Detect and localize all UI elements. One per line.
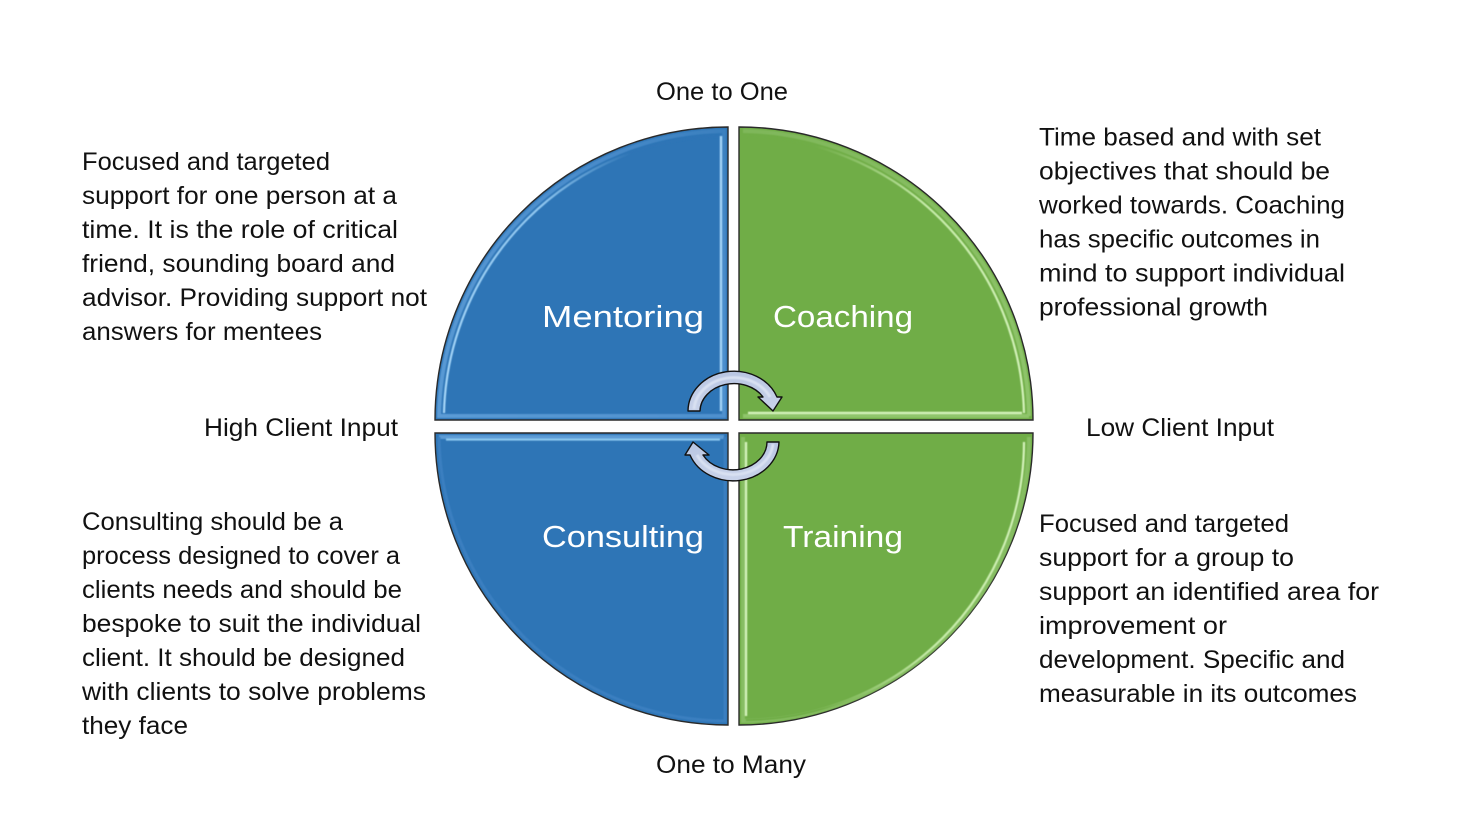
text block: Consulting description: Consulting should be a: [82, 508, 343, 536]
text block: Coaching description: objectives that should be: [1039, 158, 1330, 186]
text block: Training description: support an identified area for: [1039, 578, 1379, 606]
label: Consulting: Consulting: [542, 519, 704, 554]
label: Coaching: Coaching: [773, 299, 913, 334]
axis label: One to Many: One to Many: [656, 751, 807, 779]
quadrant: Coaching: [739, 127, 1033, 420]
text block: Training description: Focused and targeted: [1039, 510, 1289, 538]
text block: Coaching description: professional growth: [1039, 294, 1268, 322]
text block: Consulting description: client. It should be designed: [82, 644, 405, 672]
text block: Consulting description: [81, 508, 426, 740]
arrow: top circular arrow: [688, 371, 782, 411]
text block: Training description: development. Specific and: [1039, 646, 1345, 674]
text block: Consulting description: clients needs and should be: [82, 576, 402, 604]
text block: Coaching description: worked towards. Coaching: [1038, 192, 1345, 220]
label: Training: Training: [783, 519, 903, 554]
text block: Mentoring description: time. It is the role of critical: [82, 216, 398, 244]
text block: Coaching description: mind to support individual: [1039, 260, 1345, 288]
text block: Consulting description: bespoke to suit the individual: [82, 610, 421, 638]
text block: Consulting description: process designed to cover a: [82, 542, 400, 570]
text block: Coaching description: Time based and with set: [1039, 124, 1321, 152]
axis label: One to One: One to One: [656, 78, 788, 106]
text block: Mentoring description: answers for mentees: [82, 318, 322, 346]
text block: Consulting description: with clients to solve problems: [81, 678, 426, 706]
text block: Mentoring description: advisor. Providing support not: [82, 284, 427, 312]
text block: Mentoring description: Focused and targeted: [82, 148, 330, 176]
text block: Mentoring description: support for one person at a: [82, 182, 397, 210]
quadrant: Mentoring: [435, 127, 728, 420]
arrow: bottom circular arrow: [685, 442, 779, 481]
text block: Coaching description: has specific outcomes in: [1039, 226, 1320, 254]
quadrant: Training: [739, 433, 1033, 725]
text block: Coaching description: [1038, 124, 1345, 322]
text block: Training description: [1039, 510, 1379, 708]
text block: Training description: support for a group to: [1039, 544, 1294, 572]
text block: Consulting description: they face: [82, 712, 188, 740]
text block: Mentoring description: friend, sounding board and: [82, 250, 395, 278]
quadrant: Consulting: [435, 433, 728, 725]
axis label: Low Client Input: Low Client Input: [1086, 414, 1274, 442]
label: Mentoring: Mentoring: [542, 299, 704, 334]
text block: Training description: measurable in its outcomes: [1039, 680, 1357, 708]
axis label: High Client Input: High Client Input: [204, 414, 398, 442]
text block: Mentoring description: [82, 148, 427, 346]
text block: Training description: improvement or: [1039, 612, 1227, 640]
